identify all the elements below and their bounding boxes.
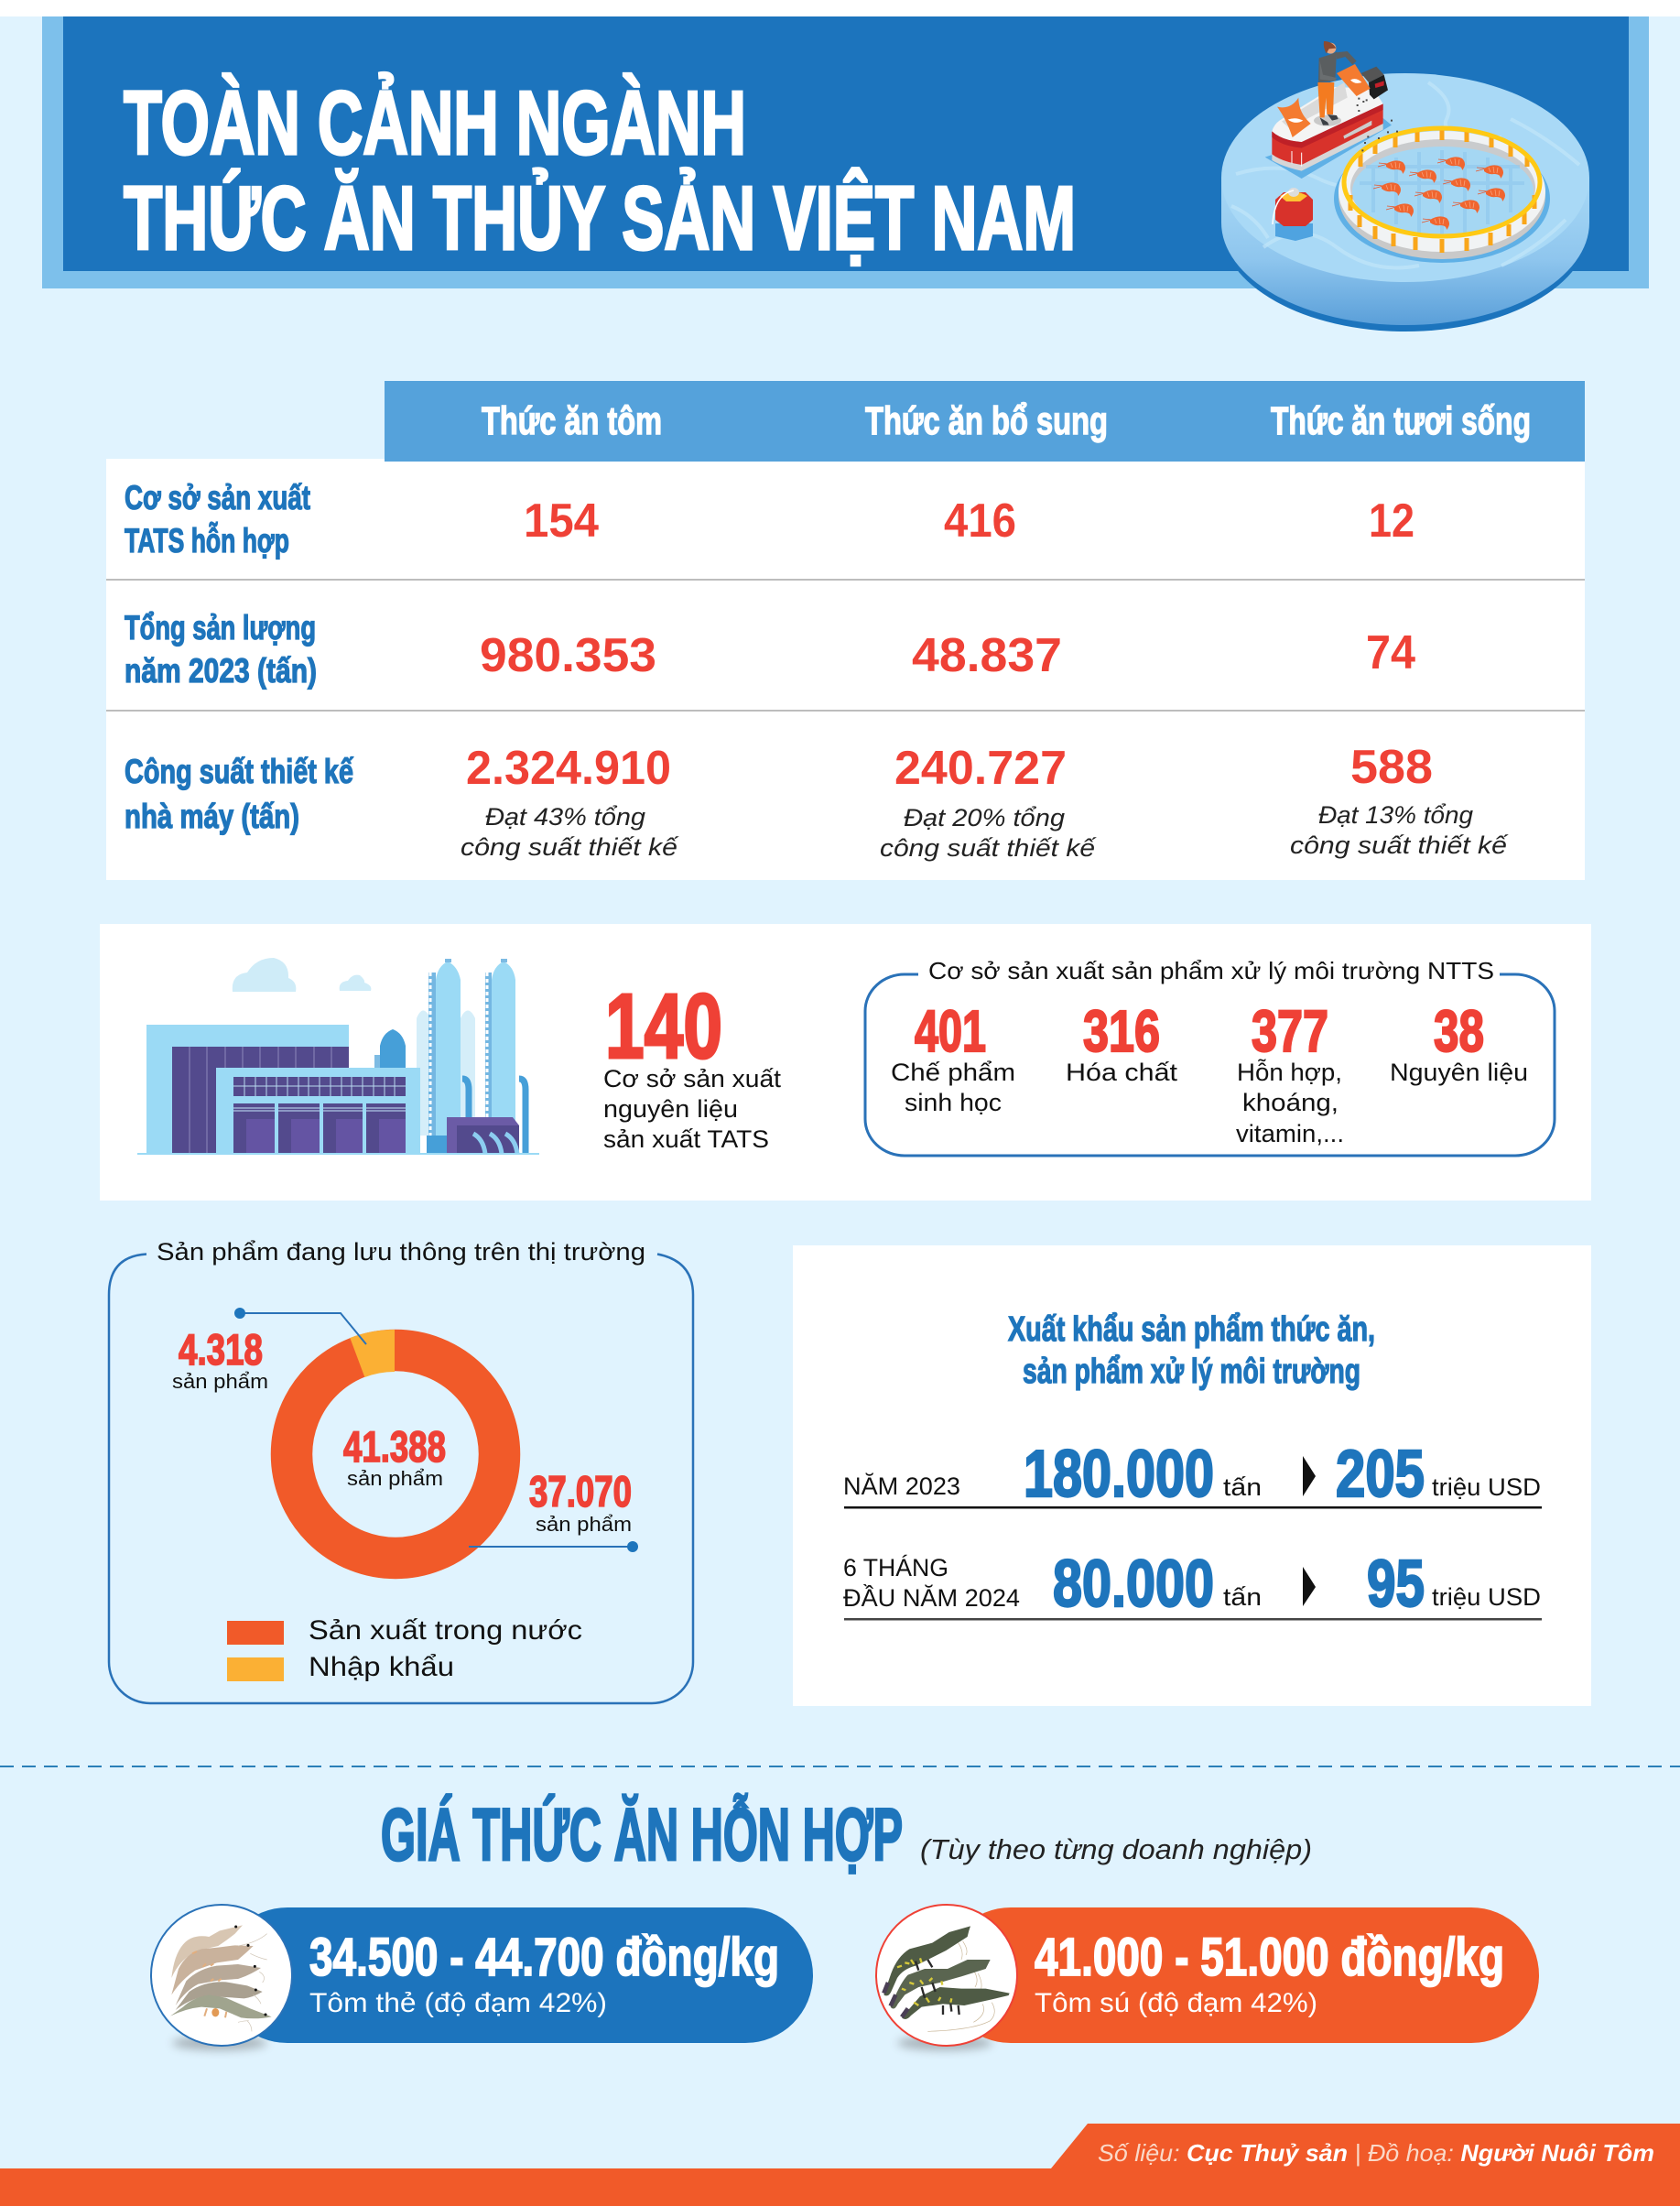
- export heading: sản phẩm xử lý môi trường: [1023, 1353, 1360, 1391]
- stat: 140 raw material facilities: sản xuất TATS: [603, 1125, 769, 1153]
- label: 37.070 products: sản phẩm: [536, 1513, 632, 1536]
- icon: factory: [137, 958, 539, 1155]
- export row: first half of 2024: ĐẦU NĂM 2024: [843, 1583, 1020, 1612]
- environmental labels: khoáng,: [1242, 1089, 1339, 1116]
- table values: [466, 494, 1433, 795]
- title: TOÀN CẢNH NGÀNH: [124, 72, 746, 173]
- export row: first half of 2024: [843, 1548, 1542, 1621]
- export heading: Xuất khẩu sản phẩm thức ăn,: [1008, 1310, 1375, 1349]
- label: 41.388 products total: sản phẩm: [347, 1467, 443, 1490]
- buoy: [1273, 188, 1313, 241]
- export heading: [1008, 1310, 1375, 1391]
- legend: Nhập khẩu: [309, 1652, 454, 1682]
- row labels: nhà máy (tấn): [125, 798, 299, 835]
- label: 4.318 products: sản phẩm: [172, 1370, 268, 1393]
- table column headers: Thức ăn bổ sung: [865, 399, 1108, 443]
- export row: 2023: 180.000: [1024, 1438, 1214, 1511]
- title: [124, 72, 1076, 268]
- table values: 980.353: [480, 629, 656, 682]
- table column headers: Thức ăn tôm: [482, 399, 662, 443]
- environmental figures: 316: [1083, 998, 1160, 1064]
- row labels: TATS hỗn hợp: [125, 522, 289, 560]
- comparison table: [106, 381, 1585, 880]
- shrimp group: [1373, 157, 1505, 230]
- price heading: (Tùy theo từng doanh nghiệp): [920, 1833, 1312, 1865]
- row labels: Tổng sản lượng: [125, 609, 316, 647]
- export row: first half of 2024: tấn: [1223, 1583, 1262, 1611]
- row labels: năm 2023 (tấn): [125, 652, 317, 690]
- legend: [227, 1615, 582, 1682]
- row labels: Cơ sở sản xuất: [125, 479, 310, 516]
- price heading: GIÁ THỨC ĂN HỖN HỢP: [381, 1793, 903, 1876]
- export row: 2023: tấn: [1223, 1473, 1262, 1501]
- table column headers: Thức ăn tươi sống: [1271, 399, 1531, 443]
- export row: first half of 2024: triệu USD: [1432, 1583, 1541, 1611]
- table values: 74: [1366, 626, 1415, 679]
- stat: 140 raw material facilities: 140: [605, 975, 722, 1078]
- price pill: black tiger shrimp: [876, 1905, 1539, 2050]
- row labels: [125, 479, 353, 835]
- export row: 2023: 205: [1336, 1438, 1425, 1511]
- table values: 48.837: [912, 629, 1062, 682]
- label: 4.318 products: 4.318: [179, 1325, 263, 1374]
- panel: environmental treatment facilities: [865, 957, 1555, 1156]
- table values: 154: [524, 494, 599, 548]
- label: 4.318 products: [172, 1325, 268, 1393]
- capacity notes: công suất thiết kế: [461, 833, 679, 861]
- footer bar with credits: [0, 2124, 1680, 2206]
- export row: first half of 2024: 95: [1367, 1548, 1425, 1621]
- environmental labels: Nguyên liệu: [1390, 1059, 1528, 1086]
- price pill: white-leg shrimp: [151, 1905, 813, 2050]
- header banner: [0, 0, 1680, 331]
- environmental labels: sinh học: [905, 1089, 1002, 1116]
- table values: 2.324.910: [466, 742, 671, 795]
- donut chart: [291, 1330, 500, 1559]
- price text: [309, 1928, 779, 2018]
- environmental figures: 401: [915, 998, 986, 1064]
- environmental figures: [915, 998, 1484, 1064]
- stat: 140 raw material facilities: nguyên liệu: [603, 1095, 738, 1123]
- panel: products on the market: [109, 1238, 693, 1703]
- stat: 140 raw material facilities: Cơ sở sản xuất: [603, 1065, 782, 1092]
- leader line: imported: [234, 1308, 366, 1344]
- price text: 41.000 - 51.000 đồng/kg: [1035, 1928, 1504, 1987]
- table values: 12: [1369, 494, 1414, 548]
- leader line: domestic: [469, 1541, 638, 1552]
- legend: Sản xuất trong nước: [309, 1615, 582, 1646]
- capacity notes: công suất thiết kế: [1290, 831, 1509, 859]
- row labels: Công suất thiết kế: [125, 753, 353, 790]
- photo: white-leg shrimp: [151, 1905, 292, 2046]
- price text: Tôm thẻ (độ đạm 42%): [309, 1988, 607, 2018]
- stat: 140 raw material facilities: [603, 975, 782, 1153]
- boat with worker: [1265, 41, 1398, 179]
- capacity notes: [461, 801, 1509, 862]
- capacity notes: Đạt 13% tổng: [1318, 801, 1473, 829]
- panel: environmental treatment facilities: Cơ sở sản xuất sản phẩm xử lý môi trường NTTS: [928, 957, 1494, 984]
- environmental labels: Hóa chất: [1066, 1059, 1178, 1086]
- environmental figures: 377: [1252, 998, 1328, 1064]
- capacity notes: Đạt 43% tổng: [485, 803, 645, 831]
- capacity notes: Đạt 20% tổng: [904, 804, 1065, 831]
- label: 37.070 products: [529, 1467, 632, 1536]
- footer bar with credits: Số liệu: Cục Thuỷ sản | Đồ hoạ: Người Nuôi Tôm: [1098, 2139, 1654, 2167]
- environmental labels: Hỗn hợp,: [1237, 1058, 1342, 1086]
- title: THỨC ĂN THỦY SẢN VIỆT NAM: [124, 168, 1076, 268]
- environmental labels: vitamin,...: [1236, 1120, 1344, 1147]
- price text: Tôm sú (độ đạm 42%): [1035, 1988, 1317, 2018]
- label: 37.070 products: 37.070: [529, 1467, 632, 1516]
- export row: first half of 2024: 80.000: [1053, 1548, 1214, 1621]
- photo: black tiger shrimp: [876, 1905, 1017, 2046]
- illustration: shrimp farm disk: [1221, 41, 1589, 331]
- panel: products on the market: Sản phẩm đang lưu thông trên thị trường: [157, 1238, 645, 1266]
- environmental labels: [891, 1058, 1528, 1147]
- environmental figures: 38: [1434, 998, 1484, 1064]
- capacity notes: công suất thiết kế: [880, 834, 1097, 862]
- export row: first half of 2024: 6 THÁNG: [843, 1554, 948, 1581]
- table values: 240.727: [894, 742, 1067, 795]
- export row: 2023: NĂM 2023: [843, 1472, 960, 1500]
- label: 41.388 products total: [343, 1422, 446, 1490]
- panel: exports: [793, 1245, 1591, 1706]
- table values: 416: [944, 494, 1016, 548]
- table column headers: [482, 399, 1531, 443]
- panel: production facilities: [100, 924, 1591, 1201]
- label: 41.388 products total: 41.388: [343, 1422, 446, 1471]
- price text: 34.500 - 44.700 đồng/kg: [309, 1928, 779, 1987]
- fish pen: [1334, 128, 1550, 263]
- export row: 2023: triệu USD: [1432, 1473, 1541, 1501]
- export row: 2023: [843, 1438, 1542, 1511]
- table values: 588: [1350, 741, 1433, 794]
- environmental labels: Chế phẩm: [891, 1059, 1015, 1086]
- price text: [1035, 1928, 1504, 2018]
